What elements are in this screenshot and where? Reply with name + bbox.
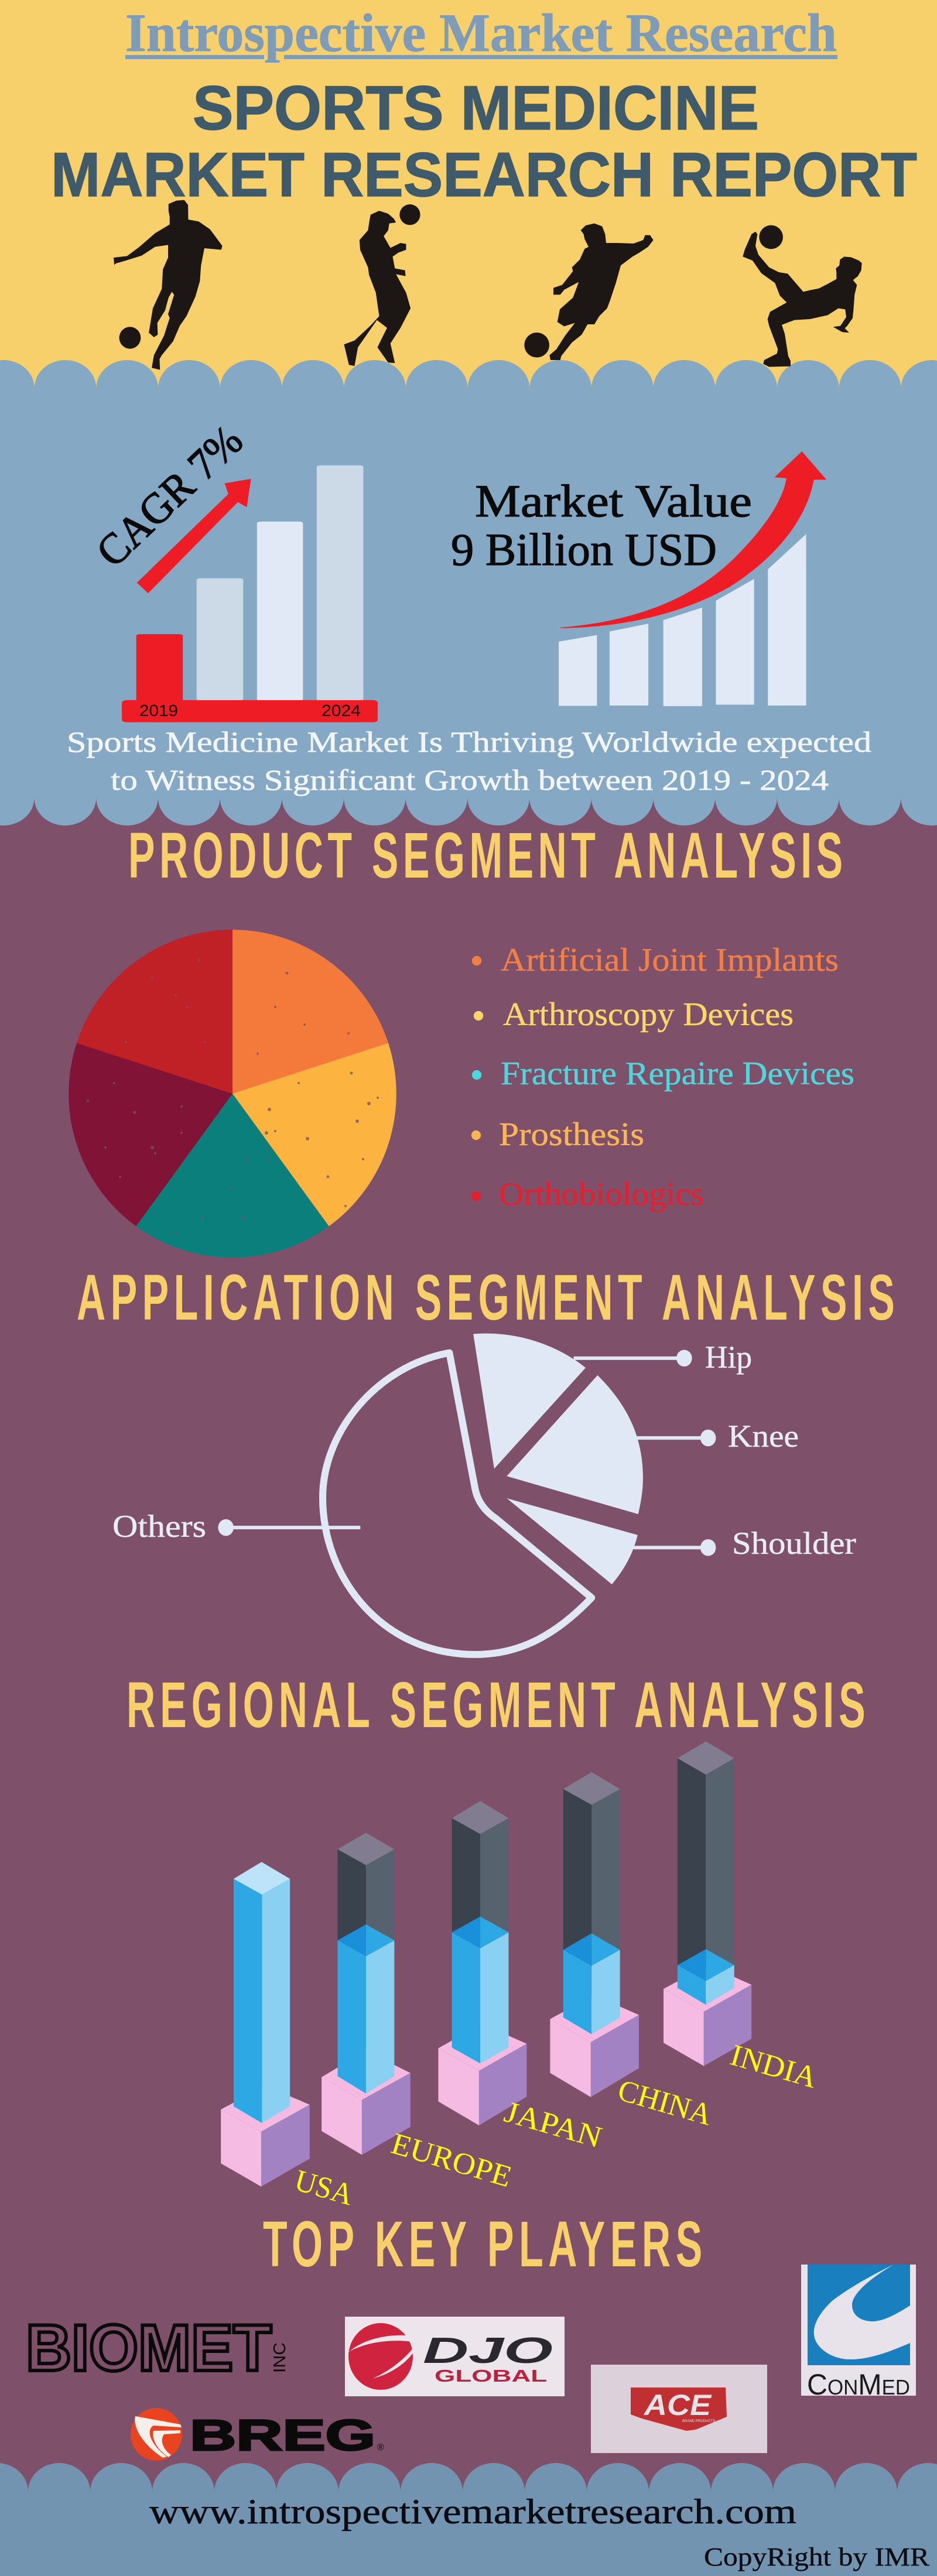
column: India	[664, 1741, 751, 2066]
slice: shoulder	[507, 1498, 638, 1584]
callout lines and dots	[218, 1350, 716, 1556]
logo: Biomet: INC	[271, 2342, 289, 2373]
panel: purple body background	[0, 761, 937, 2517]
logo: Breg: BREG	[190, 2411, 375, 2459]
logo: Biomet: BIOMET	[26, 2311, 272, 2385]
heading: regional segment: REGIONAL SEGMENT ANALYSIS	[126, 1669, 866, 1741]
icon: player kicking	[524, 224, 654, 360]
column: Europe	[322, 1832, 411, 2155]
heading: product segment: PRODUCT SEGMENT ANALYSIS	[128, 820, 843, 892]
panel: yellow header background	[0, 0, 937, 410]
callout: market value	[451, 475, 752, 575]
column: Japan	[438, 1801, 526, 2125]
labels: regions	[291, 2039, 821, 2212]
logo: DJO Global	[345, 2317, 565, 2396]
slice: others	[323, 1353, 591, 1654]
heading: top key players: TOP KEY PLAYERS	[263, 2208, 702, 2280]
heading: report title	[51, 73, 917, 210]
column: China	[550, 1772, 639, 2097]
legend item: artificial joint implants: Artificial Joint Implants	[501, 942, 839, 978]
labels: application segments: Hip	[705, 1340, 752, 1375]
logo: DJO Global: GLOBAL	[435, 2367, 547, 2386]
logo: ConMed	[801, 2265, 916, 2401]
logo: DJO Global: DJO	[423, 2331, 553, 2371]
icon: four football players silhouettes	[114, 200, 862, 370]
text block: website: www.introspectivemarketresearch.com	[149, 2492, 796, 2531]
heading: application segment: APPLICATION SEGMENT ANALYSIS	[77, 1262, 895, 1334]
labels: regions: INDIA	[727, 2039, 821, 2095]
chart: application segment pie	[218, 1334, 716, 1654]
icon: player dribbling	[114, 200, 223, 370]
callout: CAGR value: CAGR 7%	[87, 416, 252, 576]
text block: market summary: to Witness Significant Growth between 2019 - 2024	[111, 763, 829, 796]
legend item: orthobiologics: Orthobiologics	[499, 1176, 704, 1212]
logo: ACE: ACE	[643, 2389, 712, 2421]
panel: blue market section with scalloped edges	[0, 360, 937, 825]
chart: market value growth bars and arrow	[559, 451, 826, 706]
labels: regions: USA	[291, 2164, 357, 2212]
labels: application segments: Knee	[728, 1419, 799, 1454]
callout: market value: 9 Billion USD	[451, 524, 717, 575]
column: USA	[221, 1862, 310, 2187]
text block: market summary: Sports Medicine Market Is Thriving Worldwide expected	[67, 725, 871, 758]
labels: regions: EUROPE	[388, 2127, 515, 2194]
logo: Breg	[131, 2408, 384, 2461]
text block: market summary	[67, 725, 871, 796]
logo: ConMed: CONMED	[807, 2368, 910, 2401]
labels: regions: CHINA	[614, 2074, 716, 2132]
chart: CAGR bar chart 2019-2024: 2019	[139, 701, 178, 720]
icon: player heading ball	[344, 204, 420, 366]
chart: product segment pie	[69, 930, 396, 1258]
labels: application segments: Others	[112, 1509, 206, 1544]
legend item: prosthesis: Prosthesis	[499, 1116, 644, 1153]
labels: application segments	[112, 1340, 856, 1561]
chart: CAGR bar chart 2019-2024	[122, 465, 378, 722]
legend item: arthroscopy devices: Arthroscopy Devices	[503, 996, 794, 1033]
labels: regions: JAPAN	[501, 2095, 606, 2154]
callout: market value: Market Value	[475, 475, 752, 526]
legend: product segments	[471, 942, 854, 1212]
slice: knee	[507, 1375, 643, 1514]
logo: ACE	[591, 2365, 767, 2453]
logo: ACE: BRAND PRODUCTS	[682, 2420, 715, 2423]
legend item: fracture repaire devices: Fracture Repaire Devices	[501, 1056, 854, 1092]
labels: application segments: Shoulder	[732, 1526, 856, 1561]
slice: hip	[473, 1334, 586, 1469]
icon: player bicycle kick	[743, 225, 862, 367]
chart: regional isometric columns	[221, 1741, 751, 2187]
logo: Breg: ®	[377, 2443, 384, 2452]
text block: copyright: CopyRight by IMR	[704, 2543, 930, 2571]
title: company name: Introspective Market Research	[125, 3, 837, 63]
heading: report title: SPORTS MEDICINE	[193, 73, 759, 143]
chart: CAGR bar chart 2019-2024: 2024	[322, 701, 361, 720]
panel: footer blue band with scalloped edge	[0, 2463, 937, 2576]
